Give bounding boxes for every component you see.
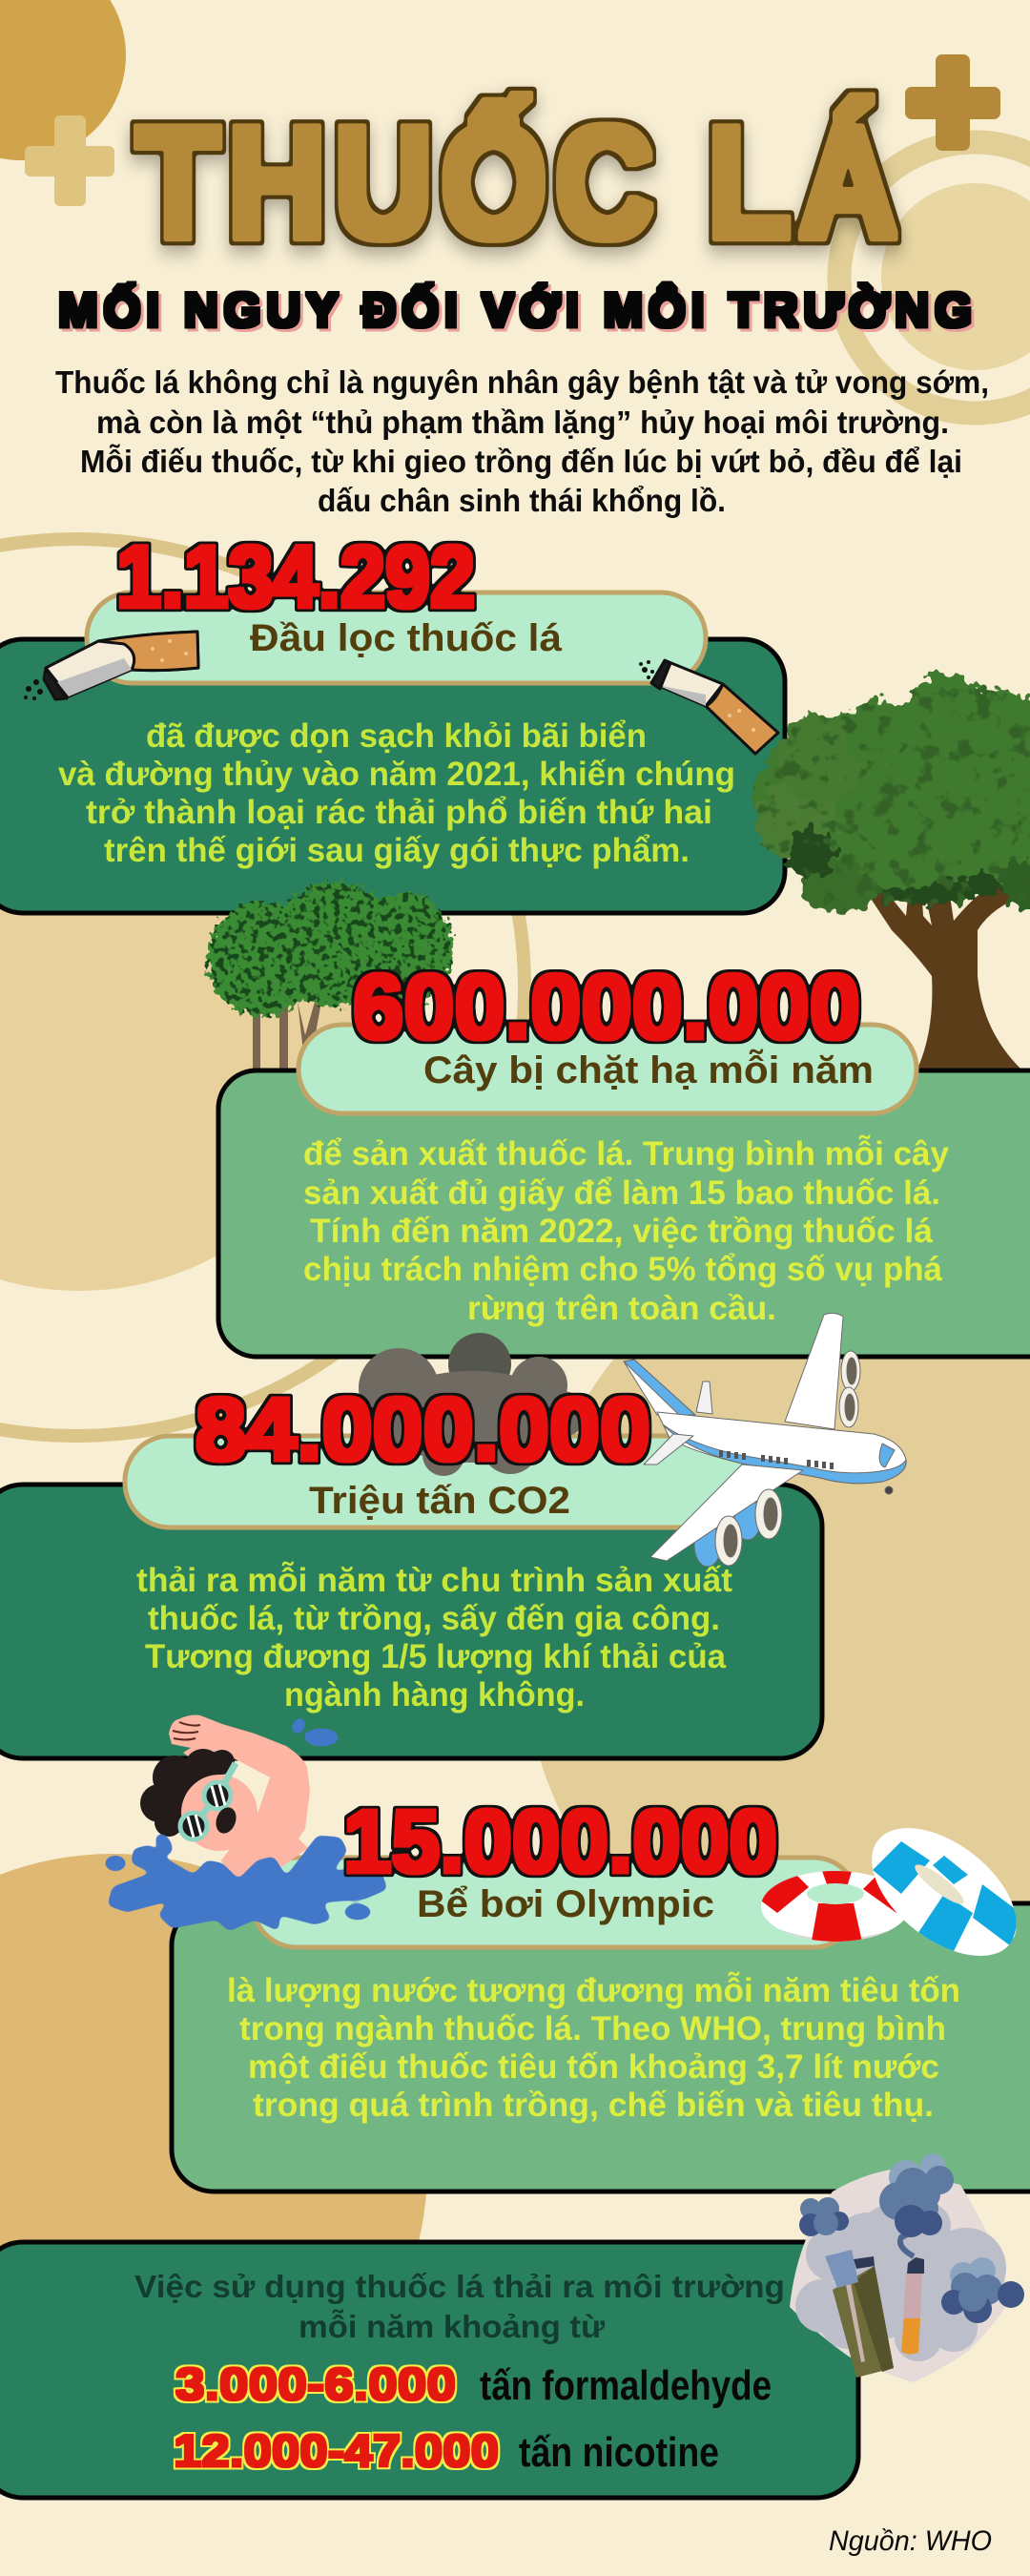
- tree trunk: [849, 863, 1030, 1069]
- source note: Nguồn: WHO: [829, 2525, 992, 2557]
- pale blob: [790, 2169, 1011, 2382]
- bottom wing and engines: [734, 1498, 761, 1540]
- label text: Cây bị chặt hạ mỗi năm: [423, 1048, 874, 1091]
- panel: trees cut: [218, 956, 1030, 1357]
- hand lines: [173, 1722, 200, 1740]
- icon: water splash: [105, 1715, 387, 1931]
- panel background: [172, 1903, 1030, 2192]
- label text: Bể bơi Olympic: [417, 1883, 714, 1925]
- body text: [227, 1971, 960, 2124]
- stat: nicotine: tấn nicotine: [519, 2429, 719, 2476]
- label pill: [87, 592, 706, 683]
- body text: [136, 1561, 732, 1714]
- body text: chịu trách nhiệm cho 5% tổng số vụ phá: [303, 1251, 943, 1288]
- stat: nicotine: 12.000-47.000: [174, 2425, 499, 2476]
- stat number: 600.000.000: [353, 956, 860, 1058]
- body text: [58, 717, 735, 869]
- panel: emissions total: [0, 2242, 858, 2498]
- panel: water use: [172, 1858, 1030, 2192]
- panel: CO2 emissions: [0, 1436, 822, 1758]
- grey smoke: [795, 2203, 1006, 2361]
- icon: blue swim ring: [872, 1828, 1017, 1956]
- icon: plus left: [25, 115, 114, 206]
- body text: trong quá trình trồng, chế biến và tiêu thụ.: [253, 2087, 934, 2124]
- label text: Đầu lọc thuốc lá: [250, 617, 563, 659]
- icon: plus right: [905, 54, 1000, 151]
- intro text: Mỗi điếu thuốc, từ khi gieo trồng đến lúc bị vứt bỏ, đều để lại: [80, 444, 962, 479]
- intro text: mà còn là một “thủ phạm thầm lặng” hủy hoại môi trường.: [96, 405, 949, 440]
- panel background: [0, 1485, 822, 1758]
- icon: airplane: [624, 1313, 906, 1567]
- icon: smoke cloud: [359, 1333, 586, 1476]
- body text: Tương đương 1/5 lượng khí thải của: [145, 1638, 727, 1675]
- body and arm: [169, 1715, 310, 1884]
- body text: trên thế giới sau giấy gói thực phẩm.: [104, 832, 690, 869]
- intro lines: Việc sử dụng thuốc lá thải ra môi trường: [134, 2269, 785, 2304]
- label pill: [299, 1025, 917, 1113]
- body text: ngành hàng không.: [284, 1676, 585, 1714]
- intro lines: mỗi năm khoảng từ: [299, 2309, 605, 2344]
- intro lines: [134, 2269, 785, 2344]
- panel background: [0, 2242, 858, 2498]
- tail: [624, 1360, 695, 1415]
- body text: đã được dọn sạch khỏi bãi biển: [146, 717, 647, 755]
- label pill: [125, 1436, 754, 1527]
- stat number: CO2: 84.000.000: [196, 1380, 650, 1479]
- panel background: [0, 639, 785, 913]
- body text: thải ra mỗi năm từ chu trình sản xuất: [136, 1561, 732, 1599]
- body text: rừng trên toàn cầu.: [467, 1290, 776, 1327]
- intro text: dấu chân sinh thái khổng lồ.: [318, 483, 726, 518]
- panel: cigarette filters: [0, 529, 785, 913]
- stat: formaldehyde: [175, 2358, 772, 2409]
- icon: small trees: [207, 883, 453, 1069]
- panel background: [218, 1070, 1030, 1357]
- body text: để sản xuất thuốc lá. Trung bình mỗi cây: [303, 1134, 950, 1173]
- body text: [303, 1134, 950, 1327]
- icon: red swim ring: [761, 1871, 904, 1942]
- intro text: Thuốc lá không chỉ là nguyên nhân gây bệnh tật và tử vong sớm,: [55, 364, 989, 400]
- icon: cigarette butt left: [24, 632, 198, 700]
- stat: formaldehyde: tấn formaldehyde: [480, 2362, 772, 2409]
- icon: big tree: [753, 673, 1030, 1069]
- intro text: [55, 364, 989, 518]
- icon: cigarette butt right: [639, 660, 778, 754]
- stat: nicotine: [174, 2425, 719, 2476]
- body text: là lượng nước tương đương mỗi năm tiêu tốn: [227, 1971, 960, 2009]
- body text: một điếu thuốc tiêu tốn khoảng 3,7 lít nước: [248, 2048, 939, 2086]
- stat: formaldehyde: 3.000-6.000: [175, 2358, 456, 2409]
- tree canopy: [753, 673, 1030, 912]
- body text: sản xuất đủ giấy để làm 15 bao thuốc lá.: [303, 1174, 940, 1212]
- dark smoke left: [799, 2197, 849, 2236]
- label pill: [253, 1858, 857, 1947]
- icon: cigarette and lighter illustration: [790, 2153, 1024, 2382]
- body text: và đường thủy vào năm 2021, khiến chúng: [58, 756, 735, 793]
- body text: thuốc lá, từ trồng, sấy đến gia công.: [148, 1600, 720, 1637]
- mouth: [213, 1804, 239, 1837]
- fuselage: [657, 1412, 906, 1484]
- body text: Tính đến năm 2022, việc trồng thuốc lá: [310, 1213, 934, 1250]
- body text: trở thành loại rác thải phổ biến thứ hai: [86, 794, 712, 831]
- dark smoke right: [941, 2257, 1024, 2323]
- label text: Triệu tấn CO2: [309, 1480, 570, 1522]
- lighter: [833, 2266, 894, 2378]
- face: [181, 1775, 258, 1851]
- top wing and engines: [841, 1351, 860, 1391]
- stat number: pools: 15.000.000: [343, 1792, 777, 1891]
- subtitle: MỐI NGUY ĐỐI VỚI MÔI TRƯỜNG: [58, 282, 972, 337]
- goggles: [180, 1763, 236, 1839]
- dark smoke top: [879, 2153, 954, 2237]
- body text: trong ngành thuốc lá. Theo WHO, trung bình: [239, 2010, 946, 2047]
- hair: [140, 1749, 235, 1837]
- stat number: 1.134.292: [116, 529, 475, 626]
- cigarette: [901, 2274, 922, 2354]
- icon: swimmer: [140, 1715, 310, 1884]
- title: THUỐC LÁ: [136, 93, 905, 270]
